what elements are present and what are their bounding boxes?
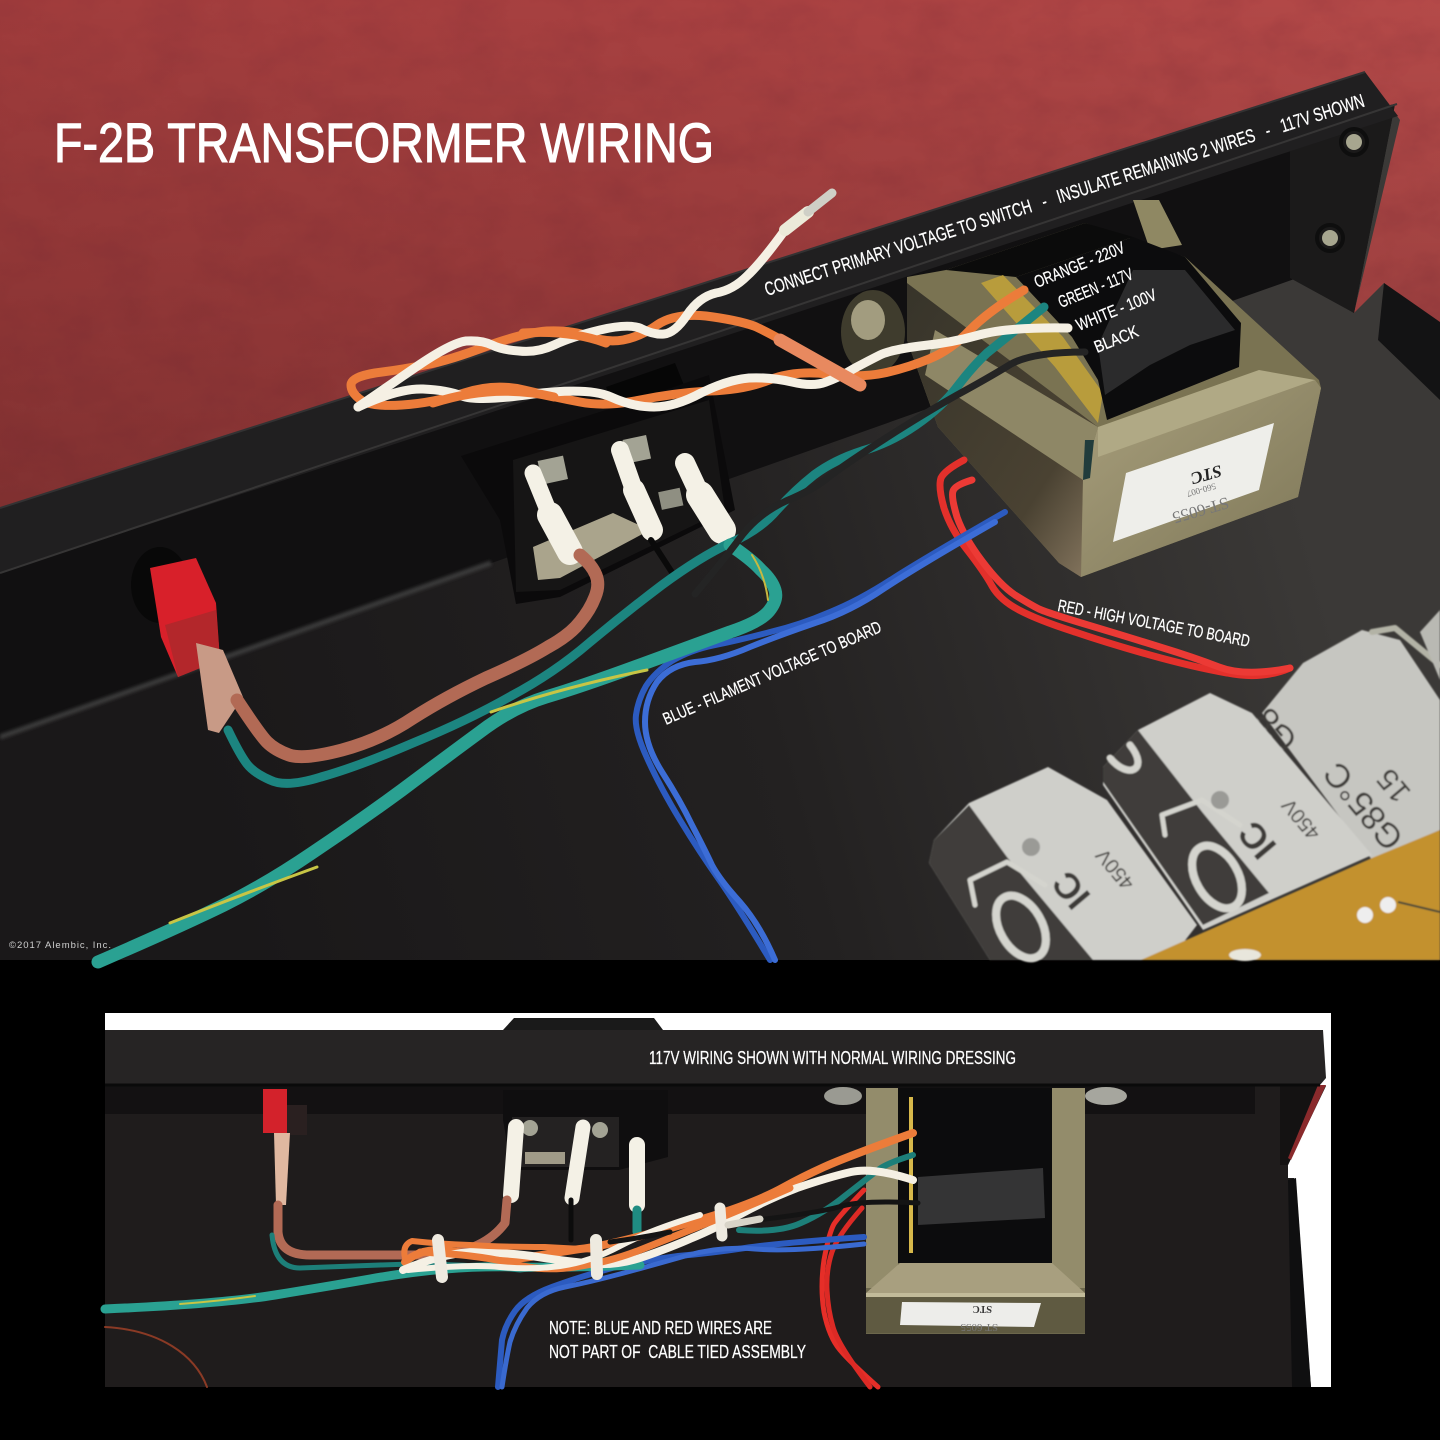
capacitor 2 bbox=[1103, 693, 1372, 930]
transformer label: STC bbox=[1188, 461, 1224, 488]
label: black: BLACK bbox=[1091, 322, 1142, 357]
brown and green mains wires bbox=[105, 1155, 918, 1387]
note: blue and red wires bbox=[549, 1318, 806, 1362]
note: blue and red wires: NOT PART OF CABLE TIED ASSEMBLY bbox=[549, 1342, 806, 1362]
twisted orange and white primary wires bbox=[351, 193, 1068, 407]
twisted cable-tied bundle bbox=[403, 1133, 913, 1277]
panel: bottom photograph bbox=[105, 1013, 1331, 1387]
blue wires bbox=[498, 1237, 864, 1387]
chassis top view bbox=[105, 1018, 1326, 1387]
red wires bbox=[940, 460, 1290, 676]
capacitor 1 bbox=[929, 767, 1197, 967]
capacitor 3: G85°C bbox=[1316, 754, 1411, 857]
power switch block bbox=[461, 375, 735, 604]
red wires bbox=[822, 1190, 878, 1387]
green-yellow and brown mains wires bbox=[98, 307, 1085, 962]
chassis bbox=[0, 72, 1440, 960]
icon: red toggle switch bbox=[131, 547, 243, 733]
power switch block bbox=[503, 1090, 668, 1240]
capacitor 1: IC bbox=[1044, 863, 1098, 917]
circuit board bbox=[1141, 830, 1440, 960]
label: orange 220V: ORANGE - 220V bbox=[1031, 238, 1128, 292]
label: white 100V: WHITE - 100V bbox=[1073, 285, 1160, 335]
transformer bbox=[866, 1088, 1085, 1334]
transformer label: ST-6055 bbox=[960, 1321, 998, 1333]
cable ties bbox=[438, 1208, 760, 1277]
carpet background bbox=[0, 0, 1440, 960]
capacitors bbox=[929, 610, 1440, 967]
caption: wiring dressing: 117V WIRING SHOWN WITH NORMAL WIRING DRESSING bbox=[649, 1048, 1016, 1068]
capacitor 3: 15 bbox=[1371, 762, 1417, 809]
transformer label: 560-007 bbox=[1185, 481, 1217, 499]
transformer label bbox=[900, 1302, 1041, 1333]
label: red high voltage: RED - HIGH VOLTAGE TO BOARD bbox=[1056, 596, 1251, 651]
icon: red toggle switch bbox=[263, 1089, 307, 1205]
transformer label bbox=[1113, 423, 1274, 542]
label: green 117V: GREEN - 117V bbox=[1055, 264, 1136, 312]
capacitor 3: G8 bbox=[1247, 700, 1305, 759]
transformer label: STC bbox=[973, 1303, 992, 1314]
title: F-2B TRANSFORMER WIRING bbox=[54, 111, 714, 174]
capacitor 2: 450V bbox=[1278, 793, 1325, 844]
capacitor 2: IC bbox=[1230, 813, 1284, 867]
label: blue filament voltage: BLUE - FILAMENT VOLTAGE TO BOARD bbox=[660, 618, 884, 729]
blue wires bbox=[636, 512, 1005, 960]
copyright: ©2017 Alembic, Inc. bbox=[9, 940, 111, 951]
capacitor 1: 450V bbox=[1092, 843, 1139, 894]
transformer bbox=[841, 200, 1321, 577]
capacitor 3 bbox=[1247, 610, 1440, 860]
note: blue and red wires: NOTE: BLUE AND RED WIRES ARE bbox=[549, 1318, 772, 1338]
transformer label: ST-6055 bbox=[1170, 493, 1231, 527]
panel: top photograph bbox=[0, 0, 1440, 967]
